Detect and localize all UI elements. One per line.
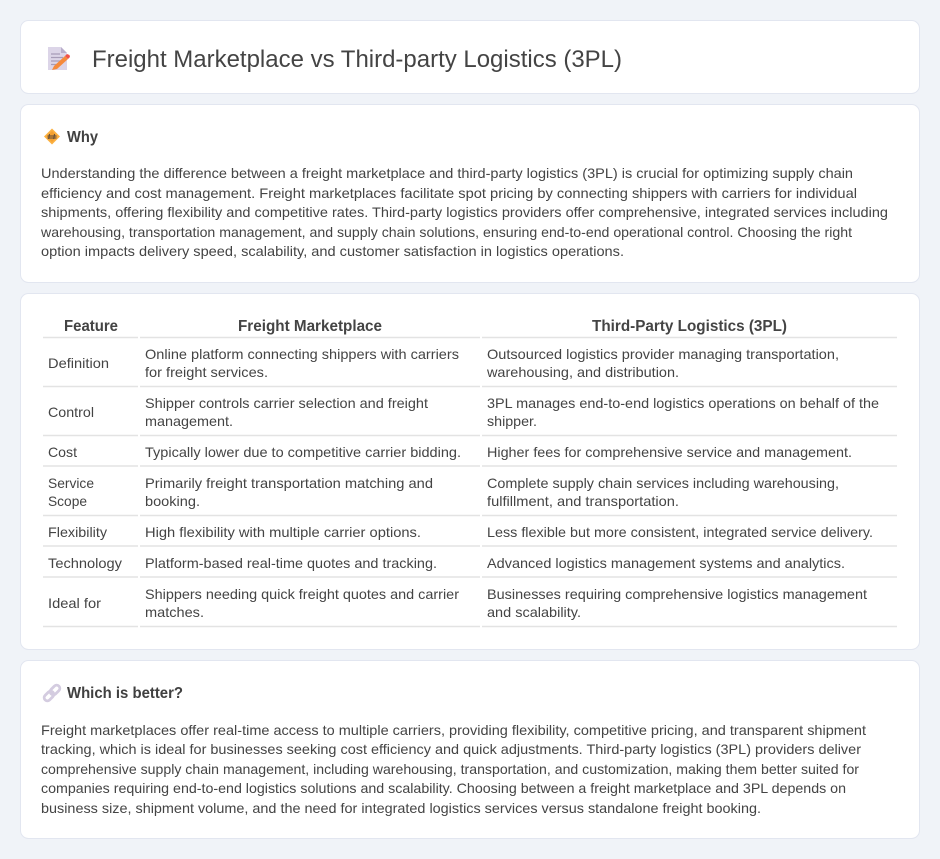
text block: why paragraph: warehousing, transportation management, and supply chain solutions, ensuring end-to-end operational control. Choosing the right xyxy=(40,224,852,240)
title: Freight Marketplace vs Third-party Logistics (3PL) xyxy=(92,46,622,73)
row: cost: Higher fees for comprehensive service and management. xyxy=(487,444,852,460)
row: ideal for: Shippers needing quick freight quotes and carrier xyxy=(145,586,459,602)
panel: why xyxy=(20,104,920,282)
text block: which is better paragraph: comprehensive supply chain management, including warehousing, transportation, and customization, making them better suited for xyxy=(41,761,859,777)
row: technology: Technology xyxy=(48,555,122,571)
heading: why: Why xyxy=(67,129,98,146)
text block: why paragraph: option impacts delivery speed, scalability, and customer satisfaction in logistics operations. xyxy=(41,243,624,259)
row: control xyxy=(48,395,879,429)
row: control: Control xyxy=(48,404,94,420)
row: ideal for xyxy=(48,586,867,620)
row: ideal for: and scalability. xyxy=(487,604,581,620)
text block: which is better paragraph: business size, shipment volume, and the need for integrated logistics services versus standalone freight booking. xyxy=(41,800,761,816)
row: definition: warehousing, and distribution. xyxy=(486,364,679,380)
text block: why paragraph: Understanding the difference between a freight marketplace and third-party logistics (3PL) is crucial for optimizing supply chain xyxy=(41,165,853,181)
row: service scope: fulfillment, and transportation. xyxy=(487,493,679,509)
text block: why paragraph: shipments, offering flexibility and competitive rates. Third-party logistics providers offer comprehensive, integrated services including xyxy=(41,204,888,220)
row: service scope: Primarily freight transportation matching and xyxy=(145,475,433,491)
panel: title header xyxy=(20,20,920,94)
row: ideal for: Ideal for xyxy=(48,595,101,611)
row: control: 3PL manages end-to-end logistics operations on behalf of the xyxy=(487,395,879,411)
row: control: management. xyxy=(145,413,233,429)
text block: which is better paragraph: tracking, which is ideal for businesses seeking cost efficiency and quick adjustments. Third-party logistics (3PL) providers deliver xyxy=(41,741,861,757)
row: technology: Platform-based real-time quotes and tracking. xyxy=(145,555,437,571)
text block: which is better paragraph: companies requiring end-to-end logistics solutions and scalability. Choosing between a freight marketplace and 3PL depends on xyxy=(41,780,846,796)
text block: why paragraph xyxy=(40,165,888,259)
row: flexibility: High flexibility with multiple carrier options. xyxy=(145,524,421,540)
row: definition xyxy=(48,346,839,380)
row: service scope xyxy=(48,475,839,509)
row: cost xyxy=(48,444,852,460)
row: service scope: Complete supply chain services including warehousing, xyxy=(487,475,839,491)
row: cost: Typically lower due to competitive carrier bidding. xyxy=(145,444,461,460)
row: service scope: booking. xyxy=(145,493,200,509)
row: control: Shipper controls carrier selection and freight xyxy=(145,395,428,411)
row: technology: Advanced logistics management systems and analytics. xyxy=(487,555,845,571)
row: ideal for: matches. xyxy=(145,604,204,620)
table header row: Third-Party Logistics (3PL) xyxy=(592,318,787,335)
row: flexibility: Less flexible but more consistent, integrated service delivery. xyxy=(487,524,873,540)
panel: which is better xyxy=(20,660,920,838)
row: flexibility: Flexibility xyxy=(48,524,107,540)
icon: memo with pencil xyxy=(48,47,70,70)
row: definition: Definition xyxy=(48,355,109,371)
panel: comparison table xyxy=(20,294,920,650)
icon: warning diamond xyxy=(44,128,60,144)
row: definition: for freight services. xyxy=(145,364,268,380)
text block: which is better paragraph xyxy=(41,722,866,816)
row: service scope: Scope xyxy=(48,493,87,509)
table header row: Freight Marketplace xyxy=(238,318,382,335)
row: control: shipper. xyxy=(487,413,537,429)
table header row xyxy=(64,318,787,335)
table header row: Feature xyxy=(64,318,118,335)
row: definition: Online platform connecting shippers with carriers xyxy=(145,346,459,362)
row: technology xyxy=(48,555,845,571)
row: ideal for: Businesses requiring comprehensive logistics management xyxy=(487,586,867,602)
icon: chain link xyxy=(43,684,61,702)
heading: which is better: Which is better? xyxy=(67,685,183,702)
text block: which is better paragraph: Freight marketplaces offer real-time access to multiple carriers, providing flexibility, competitive pricing, and transparent shipment xyxy=(41,722,866,738)
row: cost: Cost xyxy=(48,444,77,460)
row: definition: Outsourced logistics provider managing transportation, xyxy=(487,346,839,362)
row: service scope: Service xyxy=(48,475,94,491)
text block: why paragraph: efficiency and cost management. Freight marketplaces facilitate spot pricing by connecting shippers with carriers for individual xyxy=(41,185,857,201)
row: flexibility xyxy=(48,524,873,540)
